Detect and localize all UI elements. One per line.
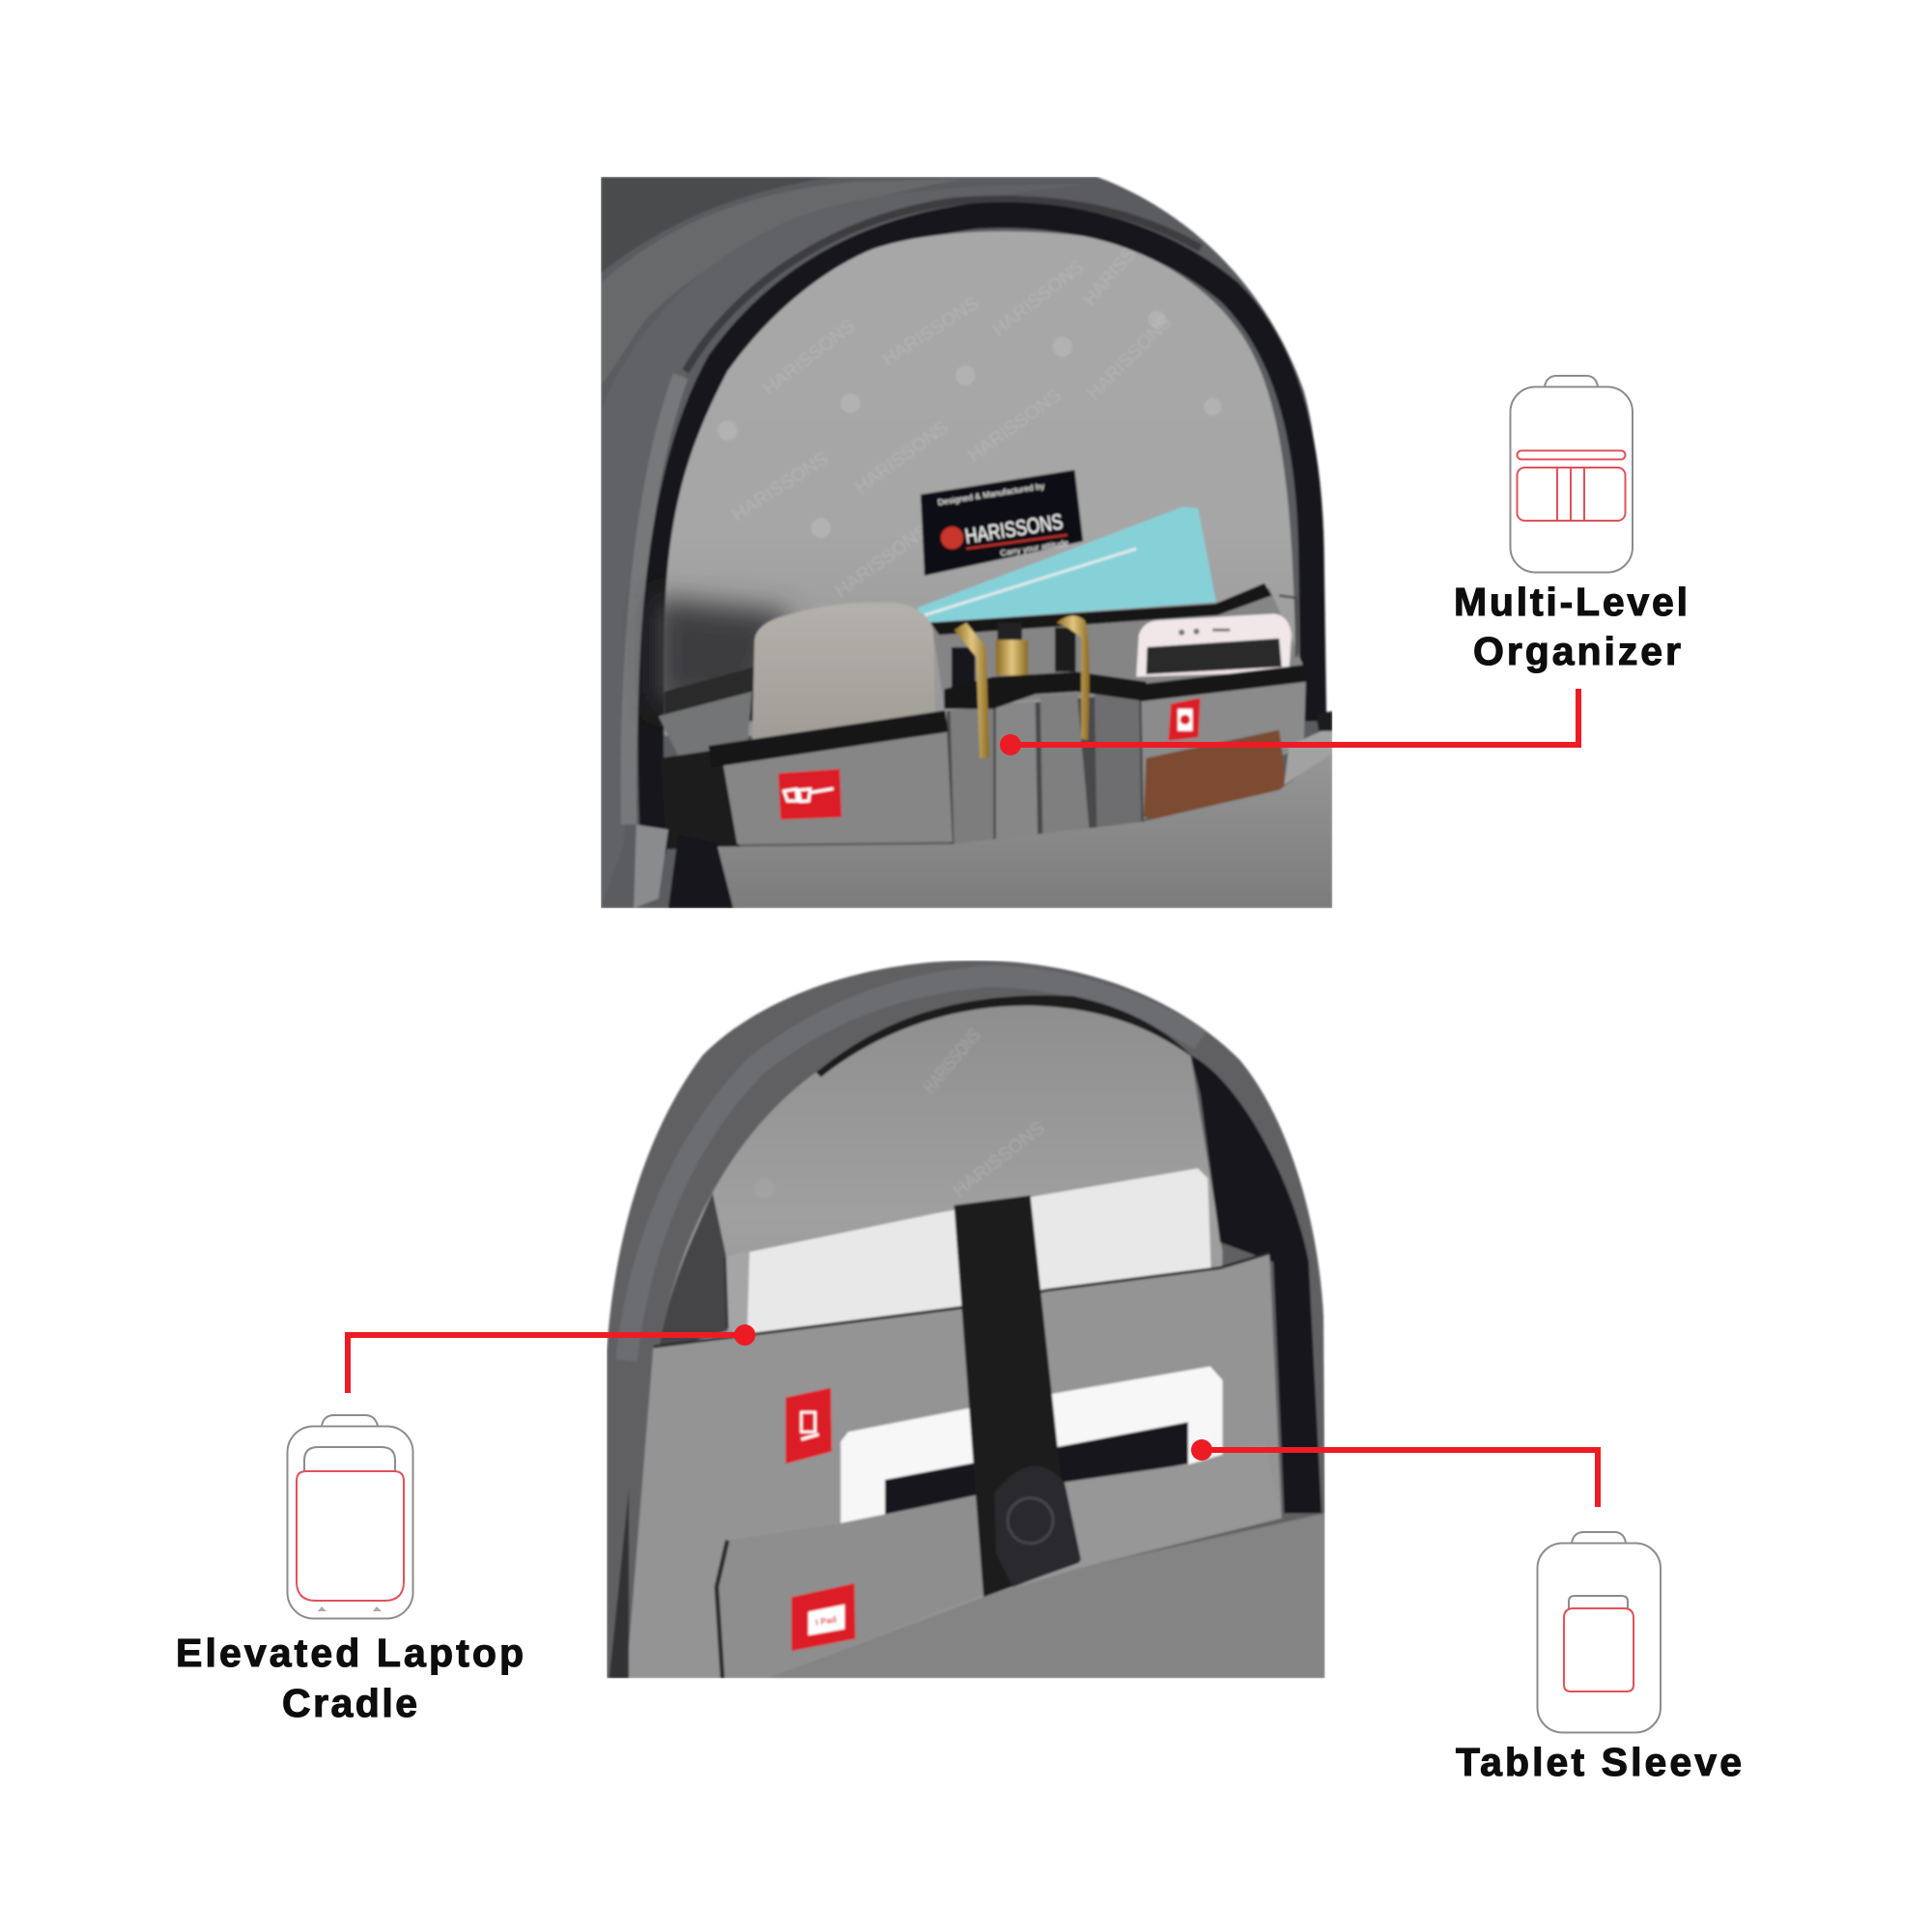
- laptop: [724, 1169, 1211, 1336]
- brand label: HARISSONS: [963, 510, 1065, 549]
- side zipper shadow: [610, 1489, 629, 1678]
- lining watermarks: HARISSONS: [851, 416, 952, 498]
- label: elevated laptop cradle: Cradle: [282, 1681, 417, 1725]
- lower flap: [668, 711, 1332, 908]
- lining watermarks: HARISSONS: [759, 315, 859, 400]
- base floor: [767, 1513, 1325, 1678]
- elastic strap: [954, 1196, 1081, 1597]
- notebook: [917, 507, 1216, 622]
- label: multi-level organizer: Organizer: [1473, 629, 1681, 673]
- front pocket: [838, 1497, 983, 1598]
- icon: laptop cradle backpack: [288, 1415, 413, 1619]
- callout: multi-level organizer leader line: [1000, 689, 1578, 755]
- callout: tablet sleeve leader line: [1191, 1439, 1598, 1507]
- lining watermarks: HARISSONS: [728, 448, 833, 526]
- power bank: [752, 603, 935, 746]
- icon: organizer backpack: [1511, 376, 1633, 572]
- black side wall: [1190, 1055, 1321, 1513]
- bag outer arch: [607, 960, 1325, 1678]
- lining watermarks: HARISS: [1079, 243, 1141, 310]
- black zip rim: [651, 215, 1314, 854]
- lining watermarks: HARISSONS: [988, 256, 1089, 341]
- brand label: Carry your attitude: [1000, 538, 1069, 558]
- zipper pull: [634, 825, 668, 908]
- red tablet tag: [791, 1583, 856, 1651]
- tablet pocket: [923, 1454, 1224, 1507]
- infographic canvas: [178, 177, 1741, 1776]
- grey lining: [668, 1005, 1224, 1341]
- label: elevated laptop cradle: [176, 1631, 524, 1725]
- pen slots: [944, 672, 1146, 844]
- lining watermarks: HARISSONS: [1083, 311, 1176, 405]
- pen barrels: [952, 622, 1076, 689]
- label: multi-level organizer: Multi-Level: [1454, 580, 1688, 624]
- lining watermarks: HARISSONS: [878, 293, 982, 370]
- label: tablet sleeve: Tablet Sleeve: [1456, 1740, 1742, 1784]
- lining watermark: HARISSONS: [919, 1025, 985, 1097]
- right pocket: [1141, 665, 1306, 819]
- phone: [1136, 613, 1292, 677]
- label: multi-level organizer: [1454, 580, 1688, 673]
- left glasses pocket: [710, 721, 952, 844]
- brand label: Designed & Manufactured by: [937, 481, 1046, 507]
- lining watermarks: [718, 243, 1222, 602]
- area left of glasses pocket: [661, 749, 740, 849]
- lining watermarks: HARISSONS: [831, 520, 933, 602]
- organizer back panel: [932, 588, 1304, 706]
- grey lining: [664, 231, 1299, 736]
- lining watermarks: HARISSONS: [964, 384, 1065, 467]
- red tablet tag: I Pad: [814, 1614, 838, 1628]
- gold pen clips: [954, 615, 1090, 758]
- laptop pocket: [626, 1252, 1282, 1678]
- lining watermark: HARISSONS: [949, 1117, 1049, 1202]
- tablet: [840, 1367, 1223, 1525]
- wallet: [1144, 730, 1287, 821]
- lining watermark: [754, 1025, 1049, 1202]
- photo: laptop and tablet compartment: [607, 960, 1325, 1678]
- callout: elevated laptop cradle leader line: [348, 1324, 755, 1393]
- photo: multi-level organizer pocket: [601, 177, 1332, 908]
- bag outer shell: [601, 177, 1332, 908]
- icon: tablet sleeve backpack: [1538, 1532, 1661, 1733]
- label: elevated laptop cradle: Elevated Laptop: [176, 1631, 524, 1675]
- brand label: [921, 469, 1083, 576]
- lining shadow: [653, 598, 791, 706]
- red laptop tag: [785, 1387, 832, 1464]
